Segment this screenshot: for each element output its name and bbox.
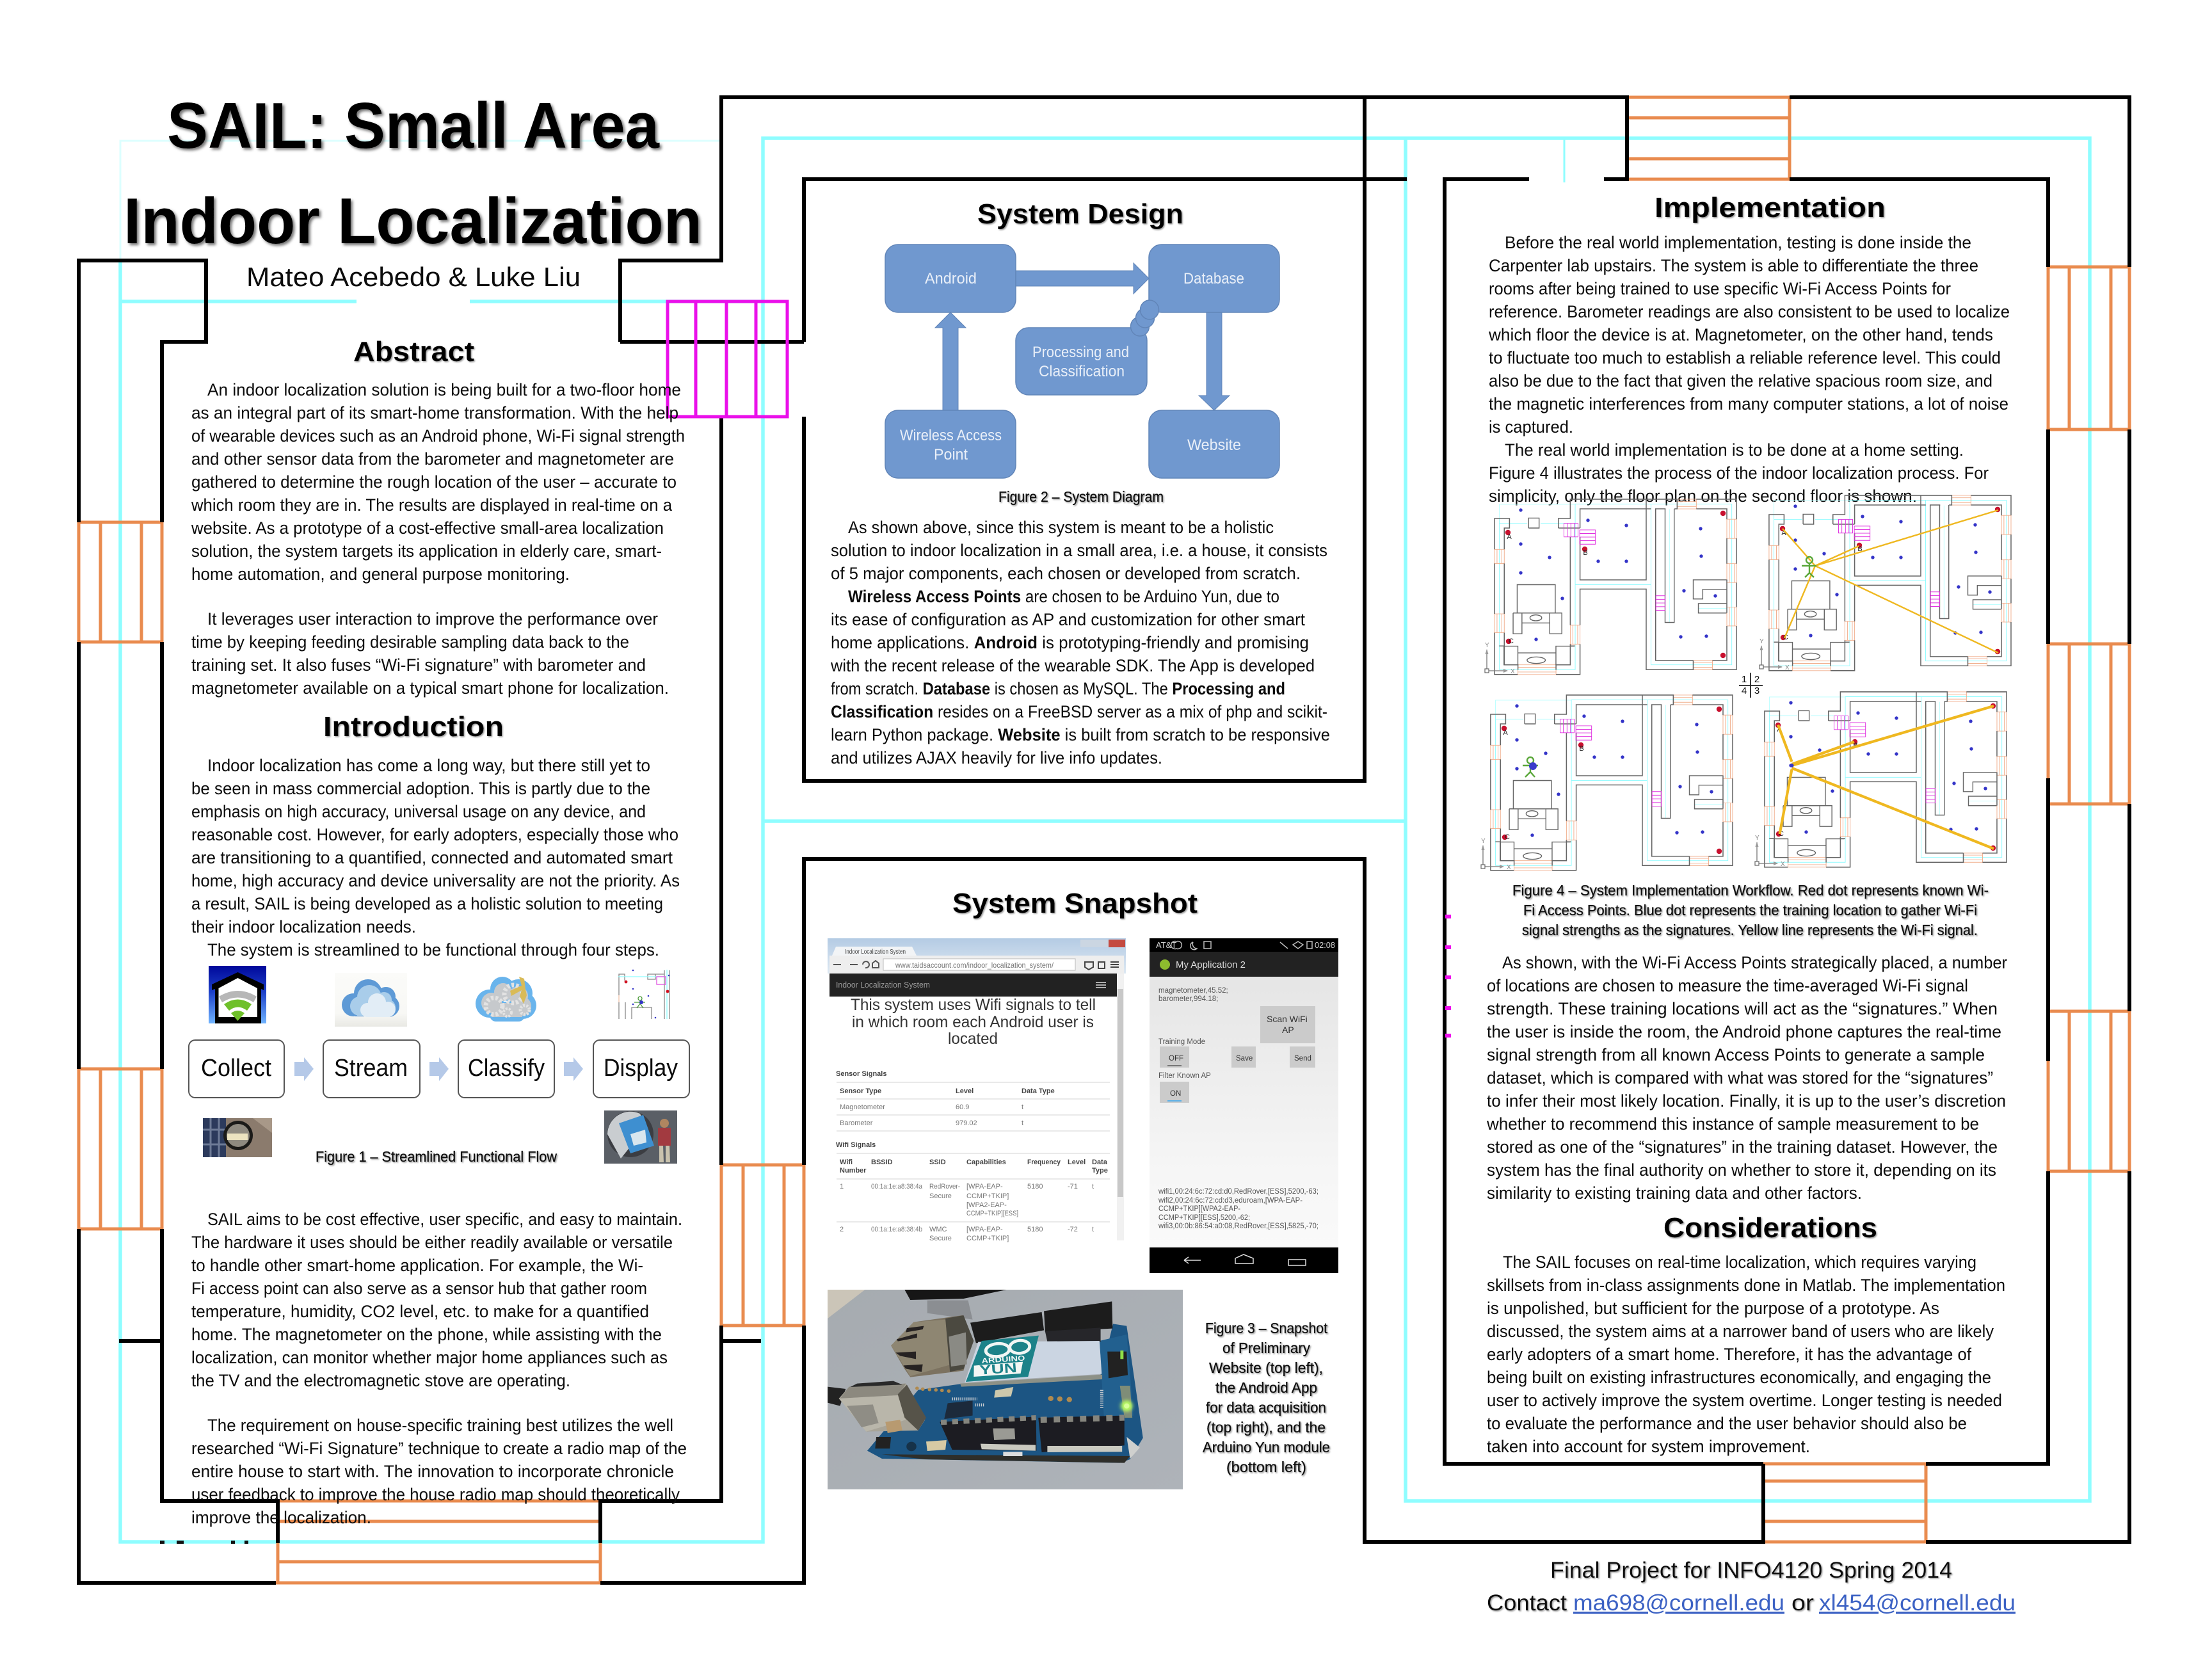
floor plan 4: sample measurement: C [1505, 833, 1510, 841]
text: abstract: and other sensor data from the barometer and magnetometer are [191, 449, 674, 469]
text: implementation continued: similarity to existing training data and other factors. [1487, 1183, 1862, 1203]
screenshot: android app: Save [1236, 1055, 1253, 1062]
text: cost and training: The requirement on house-specific training best utilizes the well [207, 1416, 673, 1435]
text: cost and training: the TV and the electromagnetic stove are operating. [191, 1371, 570, 1390]
floor plan 2: measuring signal strength: X [1785, 664, 1790, 671]
icon: mini floor plan [618, 970, 669, 1019]
heading: system design: System Design [977, 198, 1183, 230]
photo: arduino yun board [828, 1290, 1183, 1489]
box: database: Database [1183, 270, 1244, 287]
text: abstract: magnetometer available on a typical smart phone for localization. [191, 678, 669, 698]
components [944, 1400, 973, 1419]
text: system design: its ease of configuration as AP and customization for other smart [831, 610, 1306, 629]
arrow: database to website [1199, 312, 1230, 410]
screenshot: website: Wifi Signals [836, 1141, 876, 1149]
text: abstract: An indoor localization solution is being built for a two-floor home [207, 380, 681, 399]
text: abstract: home automation, and general purpose monitoring. [191, 565, 570, 584]
screenshot: android app: Send [1294, 1055, 1311, 1062]
text: implementation: simplicity, only the floor plan on the second floor is shown. [1489, 486, 1917, 506]
box: android: Android [925, 270, 977, 287]
screenshot: android app [1150, 938, 1338, 1273]
text: system design: and utilizes AJAX heavily for live info updates. [831, 748, 1162, 767]
screenshot: website: BSSID [871, 1158, 893, 1166]
screenshot: website: in which room each Android user is [852, 1013, 1094, 1031]
text: cost and training: Fi access point can also serve as a sensor hub that gather room [191, 1279, 647, 1298]
text: considerations: The SAIL focuses on real-time localization, which requires varying [1503, 1253, 1976, 1272]
icon: cloud stream [335, 973, 407, 1027]
caption: figure 3: (top right), and the [1206, 1419, 1326, 1436]
text: introduction: The system is streamlined to be functional through four steps. [207, 940, 659, 959]
text: cost and training: user feedback to improve the house radio map should theoretically [191, 1485, 680, 1504]
text: considerations: taken into account for system improvement. [1487, 1437, 1810, 1456]
text: implementation: Before the real world implementation, testing is done inside the [1505, 233, 1971, 252]
text: considerations: to evaluate the performance and the user behavior should also be [1487, 1414, 1967, 1433]
screenshot: website: Data Type [1022, 1087, 1055, 1095]
system diagram [885, 244, 1279, 478]
step: stream: Stream [334, 1055, 408, 1082]
text: system design: from scratch. Database is chosen as MySQL. The Processing and [831, 679, 1285, 698]
footer: project line: Final Project for INFO4120 Spring 2014 [1550, 1558, 1952, 1583]
step: classify: Classify [468, 1055, 545, 1082]
floor plan 3: inferred location: A [1777, 726, 1782, 733]
text: cost and training: improve the localization. [191, 1508, 371, 1527]
caption: figure 4: signal strengths as the signatures. Yellow line represents the Wi-Fi signal. [1522, 922, 1978, 938]
floor plan 1: known access points and training locations: B [1583, 549, 1588, 557]
screenshot: website: CCMP+TKIP] [966, 1192, 1009, 1200]
screenshot: website: 00:1a:1e:a8:38:4b [871, 1226, 922, 1233]
screenshot: website: [WPA-EAP- [966, 1183, 1003, 1190]
floor plan 4: sample measurement: Y [1481, 838, 1486, 845]
screenshot: website: 2 [840, 1226, 844, 1233]
text: implementation continued: to infer their most likely location. Finally, it is up to the user’s discretion [1487, 1091, 2006, 1110]
text: implementation: which floor the device is at. Magnetometer, on the other hand, tends [1488, 325, 1993, 344]
floor plan 3: inferred location: X [1781, 861, 1785, 868]
arrow [294, 1057, 314, 1081]
text: considerations: discussed, the system aims at a narrower band of users who are likely [1487, 1322, 1994, 1341]
text: implementation continued: dataset, which is compared with what was stored for the “signatures” [1487, 1068, 1993, 1087]
arrow [429, 1057, 449, 1081]
screenshot: android app: Training Mode [1158, 1038, 1205, 1046]
text: abstract: training set. It also fuses “Wi-Fi signature” with barometer and [191, 655, 646, 675]
screenshot: website: t [1092, 1183, 1094, 1190]
screenshot: website: 60.9 [956, 1103, 969, 1111]
text: considerations: user to actively improve the system overtime. Longer testing is needed [1487, 1391, 2002, 1410]
text: implementation continued: signal strength from all known Access Points to generate a sample [1487, 1045, 1985, 1064]
floor plan 4: sample measurement: X [1507, 864, 1511, 871]
screenshot: website: Data [1092, 1158, 1108, 1166]
caption: figure 3: the Android App [1215, 1379, 1317, 1396]
screenshot: android app: AP [1282, 1025, 1294, 1035]
text: system design: Wireless Access Points are chosen to be Arduino Yun, due to [848, 587, 1279, 606]
screenshot: website: 00:1a:1e:a8:38:4a [871, 1183, 923, 1190]
screenshot: website: www.taidsaccount.com/indoor_localization_system/ [895, 961, 1054, 970]
screenshot: website: Frequency [1027, 1158, 1061, 1166]
text: implementation continued: stored as one of the “signatures” in the training dataset. However, the [1487, 1137, 1998, 1157]
heading: implementation: Implementation [1655, 192, 1886, 223]
text: implementation: Carpenter lab upstairs. The system is able to differentiate the three [1489, 256, 1978, 275]
text: system design: with the recent release of the wearable SDK. The App is developed [830, 656, 1315, 675]
floor plan 3: inferred location: C [1779, 830, 1784, 838]
text: system design: Classification resides on a FreeBSD server as a mix of php and scikit- [831, 702, 1327, 721]
caption: figure 3: Website (top left), [1209, 1359, 1323, 1376]
caption: figure 3: for data acquisition [1206, 1399, 1326, 1416]
caption: figure 3: (bottom left) [1226, 1459, 1306, 1475]
screenshot: android app: Scan WiFi [1267, 1014, 1308, 1024]
floor plan 2: measuring signal strength [1759, 495, 2011, 671]
screenshot: website: Barometer [840, 1119, 873, 1127]
screenshot: website: Indoor Localization System [836, 980, 930, 990]
floor plan 4: sample measurement [1481, 695, 1733, 871]
screenshot: website: Secure [929, 1192, 952, 1200]
text: system design: home applications. Android is prototyping-friendly and promising [831, 633, 1309, 652]
text: introduction: are transitioning to a quantified, connected and automated smart [191, 848, 673, 867]
floor plan background: stairs [668, 301, 787, 417]
step: collect [189, 1040, 284, 1098]
heading: considerations: Considerations [1663, 1212, 1877, 1244]
text: system design: As shown above, since this system is meant to be a holistic [848, 518, 1274, 537]
screenshot: website: 5180 [1027, 1226, 1043, 1233]
screenshot: website: [WPA-EAP- [966, 1226, 1003, 1233]
text: cost and training: SAIL aims to be cost effective, user specific, and easy to maintain. [207, 1210, 682, 1229]
text: introduction: home, high accuracy and device universality are not the priority. As [191, 871, 680, 890]
floor plan 1: known access points and training locations: X [1511, 668, 1515, 675]
step: stream [323, 1040, 420, 1098]
box: wireless access point [885, 410, 1016, 478]
screenshot: website [828, 938, 1126, 1242]
box: website [1149, 410, 1279, 478]
text: abstract [191, 380, 685, 698]
text: implementation: rooms after being trained to use specific Wi-Fi Access Points for [1489, 279, 1951, 298]
text: abstract: solution, the system targets its application in elderly care, smart- [191, 541, 662, 561]
text: implementation: The real world implementation is to be done at a home setting. [1505, 440, 1964, 460]
box: wireless access point: Point [934, 446, 968, 463]
text: cost and training: researched “Wi-Fi Signature” technique to create a radio map of the [191, 1439, 687, 1458]
step: display: Display [604, 1055, 678, 1082]
floor plan 1: known access points and training locations: C [1509, 637, 1514, 645]
screenshot: website: CCMP+TKIP] [966, 1235, 1009, 1242]
text: implementation [1488, 233, 2010, 506]
box: processing and classification: Classification [1039, 363, 1125, 380]
text: implementation: reference. Barometer readings are also consistent to be used to localize [1489, 302, 2010, 321]
screenshot: android app: CCMP+TKIP][ESS],5200,-62; [1158, 1214, 1250, 1222]
screenshot: website: SSID [929, 1158, 946, 1166]
quadrant index: 3 [1754, 685, 1759, 696]
text: system design [830, 518, 1330, 767]
connector: processing to database [1130, 300, 1158, 336]
text: implementation: Figure 4 illustrates the process of the indoor localization process. For [1489, 463, 1989, 483]
floor plan 3: inferred location: B [1853, 742, 1858, 749]
box: database [1149, 244, 1279, 312]
pin headers [940, 1416, 1036, 1451]
caption: figure 3: Figure 3 – Snapshot [1205, 1320, 1328, 1336]
screenshot: website: CCMP+TKIP][ESS] [966, 1210, 1018, 1217]
photo: arduino yun board: ARDUINO [981, 1354, 1025, 1365]
screenshot: android app: wifi1,00:24:6c:72:cd:d0,RedRover,[ESS],5200,-63; [1158, 1188, 1318, 1196]
text: abstract: It leverages user interaction to improve the performance over [207, 609, 658, 629]
arrow: android to database [1016, 263, 1149, 294]
screenshot: website: RedRover- [929, 1183, 960, 1190]
box: wireless access point: Wireless Access [900, 427, 1002, 444]
text: system design: solution to indoor localization in a small area, i.e. a house, it consists [831, 541, 1327, 560]
quadrant index: 4 [1742, 685, 1747, 696]
floor plan 3: inferred location [1755, 692, 2007, 868]
screenshot: android app: magnetometer,45.52; [1158, 987, 1228, 995]
screenshot: android app: 02:08 [1315, 940, 1335, 950]
screenshot: website: Wifi [840, 1158, 853, 1166]
text: implementation continued: whether to recommend this instance of sample measurement to be [1486, 1114, 1979, 1134]
screenshot: website: WMC [929, 1226, 947, 1233]
heading: system snapshot: System Snapshot [952, 888, 1198, 919]
heading: introduction: Introduction [323, 711, 504, 742]
text: implementation: the magnetic interferences from many computer stations, a lot of noise [1489, 394, 2008, 413]
screenshot: website: Secure [929, 1235, 952, 1242]
caption: figure 4 [1512, 882, 1989, 938]
ethernet port [891, 1315, 973, 1377]
floor plan 4: sample measurement: A [1503, 729, 1508, 737]
screenshot: website: Magnetometer [840, 1103, 885, 1111]
screenshot: website: Sensor Type [840, 1087, 881, 1095]
text: implementation: also be due to the fact that given the relative spacious room size, and [1489, 371, 1992, 390]
screenshot: android app: OFF [1169, 1055, 1183, 1062]
caption: figure 1: Figure 1 – Streamlined Functional Flow [316, 1148, 557, 1165]
usb port [828, 1387, 846, 1406]
screenshot: android app: barometer,994.18; [1158, 995, 1218, 1003]
text: considerations: skillsets from in-class assignments done in Matlab. The implementation [1487, 1276, 2005, 1295]
text: abstract: gathered to determine the rough location of the user – accurate to [191, 472, 677, 492]
screenshot: website: Capabilities [966, 1158, 1006, 1166]
screenshot: website: Sensor Signals [836, 1070, 886, 1078]
floor plan 1: known access points and training locations: A [1507, 533, 1512, 541]
quadrant index: 1 [1742, 674, 1747, 685]
board [867, 1324, 1143, 1463]
screenshot: website: Level [956, 1087, 974, 1095]
text: cost and training [191, 1210, 687, 1527]
text: cost and training: temperature, humidity, CO2 level, etc. to make for a quantified [191, 1302, 649, 1321]
stair fragments [1445, 915, 1451, 1038]
quadrant index [1739, 673, 1763, 698]
text: cost and training: localization, can monitor whether major home appliances such as [191, 1348, 668, 1367]
text: abstract: of wearable devices such as an Android phone, Wi-Fi signal strength [191, 426, 685, 445]
text: considerations: is unpolished, but sufficient for the purpose of a prototype. As [1487, 1299, 1939, 1318]
icon: wifi house [209, 966, 266, 1023]
screenshot: website: -72 [1068, 1226, 1078, 1233]
caption: figure 4: Fi Access Points. Blue dot represents the training location to gather Wi-Fi [1523, 902, 1977, 918]
floor plan 2: measuring signal strength: C [1783, 634, 1788, 641]
footer: or: or [1791, 1591, 1814, 1615]
screenshot: android app: AT&T [1156, 940, 1176, 950]
text: implementation continued: strength. These training locations will act as the “signatures.” When [1487, 999, 1998, 1018]
text: implementation continued: the user is inside the room, the Android phone captures the real-time [1487, 1022, 2001, 1041]
photo: smart watch on wrist [203, 1118, 272, 1157]
heading: abstract: Abstract [353, 336, 474, 367]
box: android [885, 244, 1016, 312]
floor plan 1: known access points and training locations: Y [1485, 642, 1489, 649]
text: implementation continued: of locations are chosen to measure the time-averaged Wi-Fi signal [1487, 976, 1968, 995]
screenshot: website: Level [1068, 1158, 1086, 1166]
text: system design: of 5 major components, each chosen or developed from scratch. [831, 564, 1301, 583]
screenshot: android app: wifi2,00:24:6c:72:cd:d3,eduroam,[WPA-EAP- [1158, 1197, 1302, 1205]
figure 1: streamlined functional flow [189, 966, 689, 1165]
screenshot: website: Type [1092, 1167, 1108, 1174]
screenshot: android app: My Application 2 [1176, 959, 1246, 970]
arrow: access point to android [935, 312, 966, 410]
floor plan 3: inferred location: Y [1755, 835, 1759, 842]
screenshot: website: -71 [1068, 1183, 1078, 1190]
screenshot: website: t [1022, 1119, 1023, 1127]
screenshot: website: located [948, 1030, 998, 1048]
text: implementation: to fluctuate too much to establish a reliable reference level. This could [1489, 348, 2001, 367]
text: cost and training: to handle other smart-home application. For example, the Wi- [191, 1256, 643, 1275]
footer: first email: ma698@cornell.edu [1573, 1591, 1784, 1615]
caption: figure 3: of Preliminary [1222, 1340, 1310, 1356]
text: introduction [191, 756, 680, 959]
text: considerations: early adopters of a smart home. Therefore, it has the advantage of [1487, 1345, 1972, 1364]
footer: contact label: Contact [1487, 1591, 1567, 1615]
caption: figure 2: Figure 2 – System Diagram [998, 488, 1164, 505]
title [124, 90, 702, 257]
text: introduction: be seen in mass commercial adoption. This is partly due to the [191, 779, 650, 798]
text: considerations: being built on existing infrastructures economically, and engaging the [1487, 1368, 1991, 1387]
text: introduction: emphasis on high accuracy, universal usage on any device, and [191, 802, 646, 821]
text: implementation continued [1486, 953, 2007, 1203]
text: introduction: reasonable cost. However, for early adopters, especially those who [191, 825, 678, 844]
text: introduction: their indoor localization needs. [191, 917, 416, 936]
floor plan 2: measuring signal strength: A [1781, 529, 1786, 537]
caption: figure 4: Figure 4 – System Implementation Workflow. Red dot represents known Wi- [1512, 882, 1989, 899]
title: SAIL: Small Area [167, 90, 660, 162]
floor plan background: cyan guide lines [120, 138, 2090, 1542]
text: abstract: which room they are in. The results are displayed in real-time on a [191, 495, 672, 515]
icon: cloud gears [476, 977, 536, 1022]
floor plan 2: measuring signal strength: B [1857, 545, 1863, 553]
text: system design: learn Python package. Website is built from scratch to be responsive [831, 725, 1330, 744]
caption: figure 3 [1203, 1320, 1330, 1475]
authors: Mateo Acebedo & Luke Liu [246, 262, 581, 292]
title: Indoor Localization [124, 186, 702, 257]
photo: arduino yun board: YUN [979, 1360, 1018, 1377]
text: introduction: a result, SAIL is being developed as a holistic solution to meeting [191, 894, 663, 913]
text: cost and training: home. The magnetometer on the phone, while assisting with the [191, 1325, 662, 1344]
footer: project and contact [1487, 1558, 2016, 1615]
text: abstract: as an integral part of its smart-home transformation. With the help [191, 403, 678, 422]
screenshot: android app: Filter Known AP [1158, 1072, 1211, 1080]
screenshot: website: 1 [840, 1183, 844, 1190]
text: cost and training: entire house to start with. The innovation to incorporate chronicle [191, 1462, 674, 1481]
box: processing and classification [1016, 328, 1147, 395]
text: cost and training: The hardware it uses should be either readily available or versatile [191, 1233, 673, 1252]
step: classify [458, 1040, 554, 1098]
screenshot: website: 5180 [1027, 1183, 1043, 1190]
screenshot: website: Indoor Localization Systen [845, 948, 906, 956]
screenshot: website: This system uses Wifi signals to tell [851, 996, 1096, 1014]
floor plan 4: sample measurement: B [1579, 745, 1584, 753]
text: implementation continued: As shown, with the Wi-Fi Access Points strategically placed, a number [1502, 953, 2007, 972]
floor plan 1: known access points and training locations [1485, 499, 1736, 675]
photo: person with map on phone [604, 1110, 677, 1164]
screenshot: website: t [1092, 1226, 1094, 1233]
floor plan 2: measuring signal strength: Y [1759, 638, 1764, 645]
screenshot: android app: CCMP+TKIP][WPA2-EAP- [1158, 1205, 1240, 1213]
text: implementation continued: system has the final authority on whether to store it, depending on its [1487, 1160, 1996, 1180]
step: collect: Collect [201, 1055, 271, 1082]
screenshot: website: t [1022, 1103, 1023, 1111]
screenshot: android app: wifi3,00:0b:86:54:a0:08,RedRover,[ESS],5825,-70; [1158, 1222, 1318, 1230]
text: introduction: Indoor localization has come a long way, but there still yet to [207, 756, 650, 775]
caption: figure 3: Arduino Yun module [1203, 1439, 1330, 1455]
text: abstract: website. As a prototype of a cost-effective small-area localization [191, 518, 664, 538]
quadrant index: 2 [1754, 674, 1759, 685]
arrow [564, 1057, 583, 1081]
screenshot: website: 979.02 [956, 1119, 977, 1127]
text: abstract: time by keeping feeding desirable sampling data back to the [191, 632, 629, 652]
text: considerations [1487, 1253, 2005, 1456]
box: processing and classification: Processing and [1032, 344, 1129, 361]
screenshot: website: Number [840, 1167, 867, 1174]
footer: second email: xl454@cornell.edu [1819, 1591, 2016, 1615]
text: implementation: is captured. [1489, 417, 1573, 437]
box: website: Website [1187, 437, 1241, 454]
step: display [593, 1040, 689, 1098]
screenshot: android app: ON [1170, 1090, 1181, 1098]
wall fragments [160, 1541, 248, 1544]
screenshot: website: [WPA2-EAP- [966, 1201, 1007, 1209]
